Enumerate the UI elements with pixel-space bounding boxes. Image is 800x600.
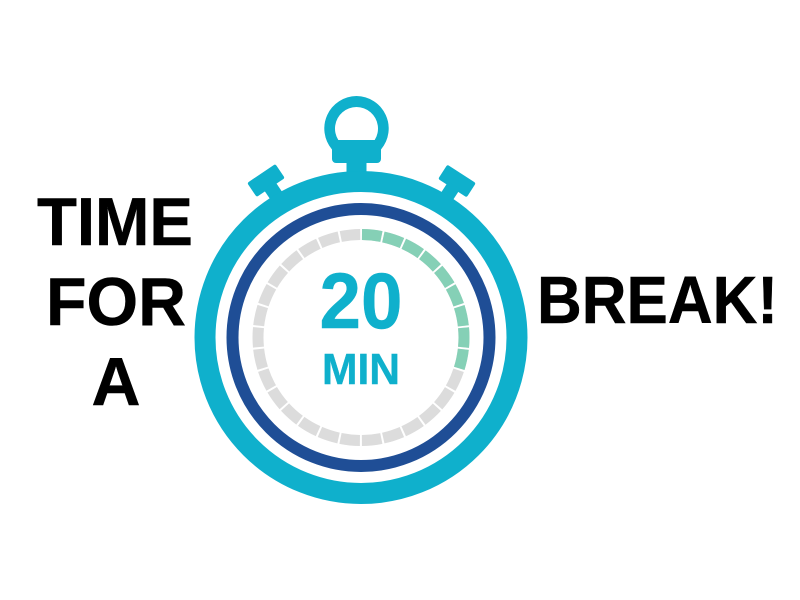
left pusher button xyxy=(247,164,292,208)
icon: stopwatch xyxy=(205,96,517,494)
heading: time for a: TIME xyxy=(37,184,193,260)
green elapsed segments xyxy=(258,234,464,440)
heading: time for a: A xyxy=(92,344,140,420)
right pusher button xyxy=(431,165,476,208)
grey progress track xyxy=(258,234,464,440)
heading: break: BREAK! xyxy=(537,263,778,338)
outer cyan ring xyxy=(205,182,517,494)
dark blue ring xyxy=(232,209,490,466)
timer value: 20 xyxy=(320,256,402,345)
timer unit: MIN xyxy=(322,345,400,394)
heading: time for a: FOR xyxy=(46,264,186,340)
heading: time for a xyxy=(37,184,193,420)
stopwatch crown xyxy=(324,96,389,175)
